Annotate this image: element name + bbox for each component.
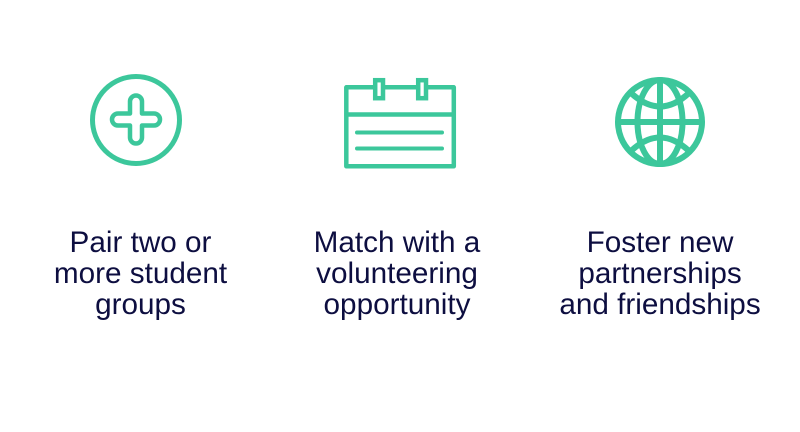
caption: volunteering: Match with a	[314, 226, 480, 258]
caption: partnerships: and friendships	[559, 288, 761, 320]
caption: pair groups: groups	[95, 288, 186, 320]
caption: volunteering: opportunity	[324, 288, 470, 320]
caption: volunteering: volunteering	[316, 256, 478, 290]
caption: pair groups: Pair two or	[70, 226, 211, 258]
caption: partnerships: Foster new	[587, 226, 733, 258]
icon: globe	[618, 80, 702, 164]
icon: plus in circle	[92, 76, 180, 164]
caption: pair groups: more student	[54, 256, 227, 290]
caption: volunteering	[314, 226, 480, 320]
caption: pair groups	[54, 226, 227, 320]
caption: partnerships: partnerships	[578, 256, 742, 290]
icon: calendar	[346, 80, 454, 166]
caption: partnerships	[559, 226, 761, 320]
